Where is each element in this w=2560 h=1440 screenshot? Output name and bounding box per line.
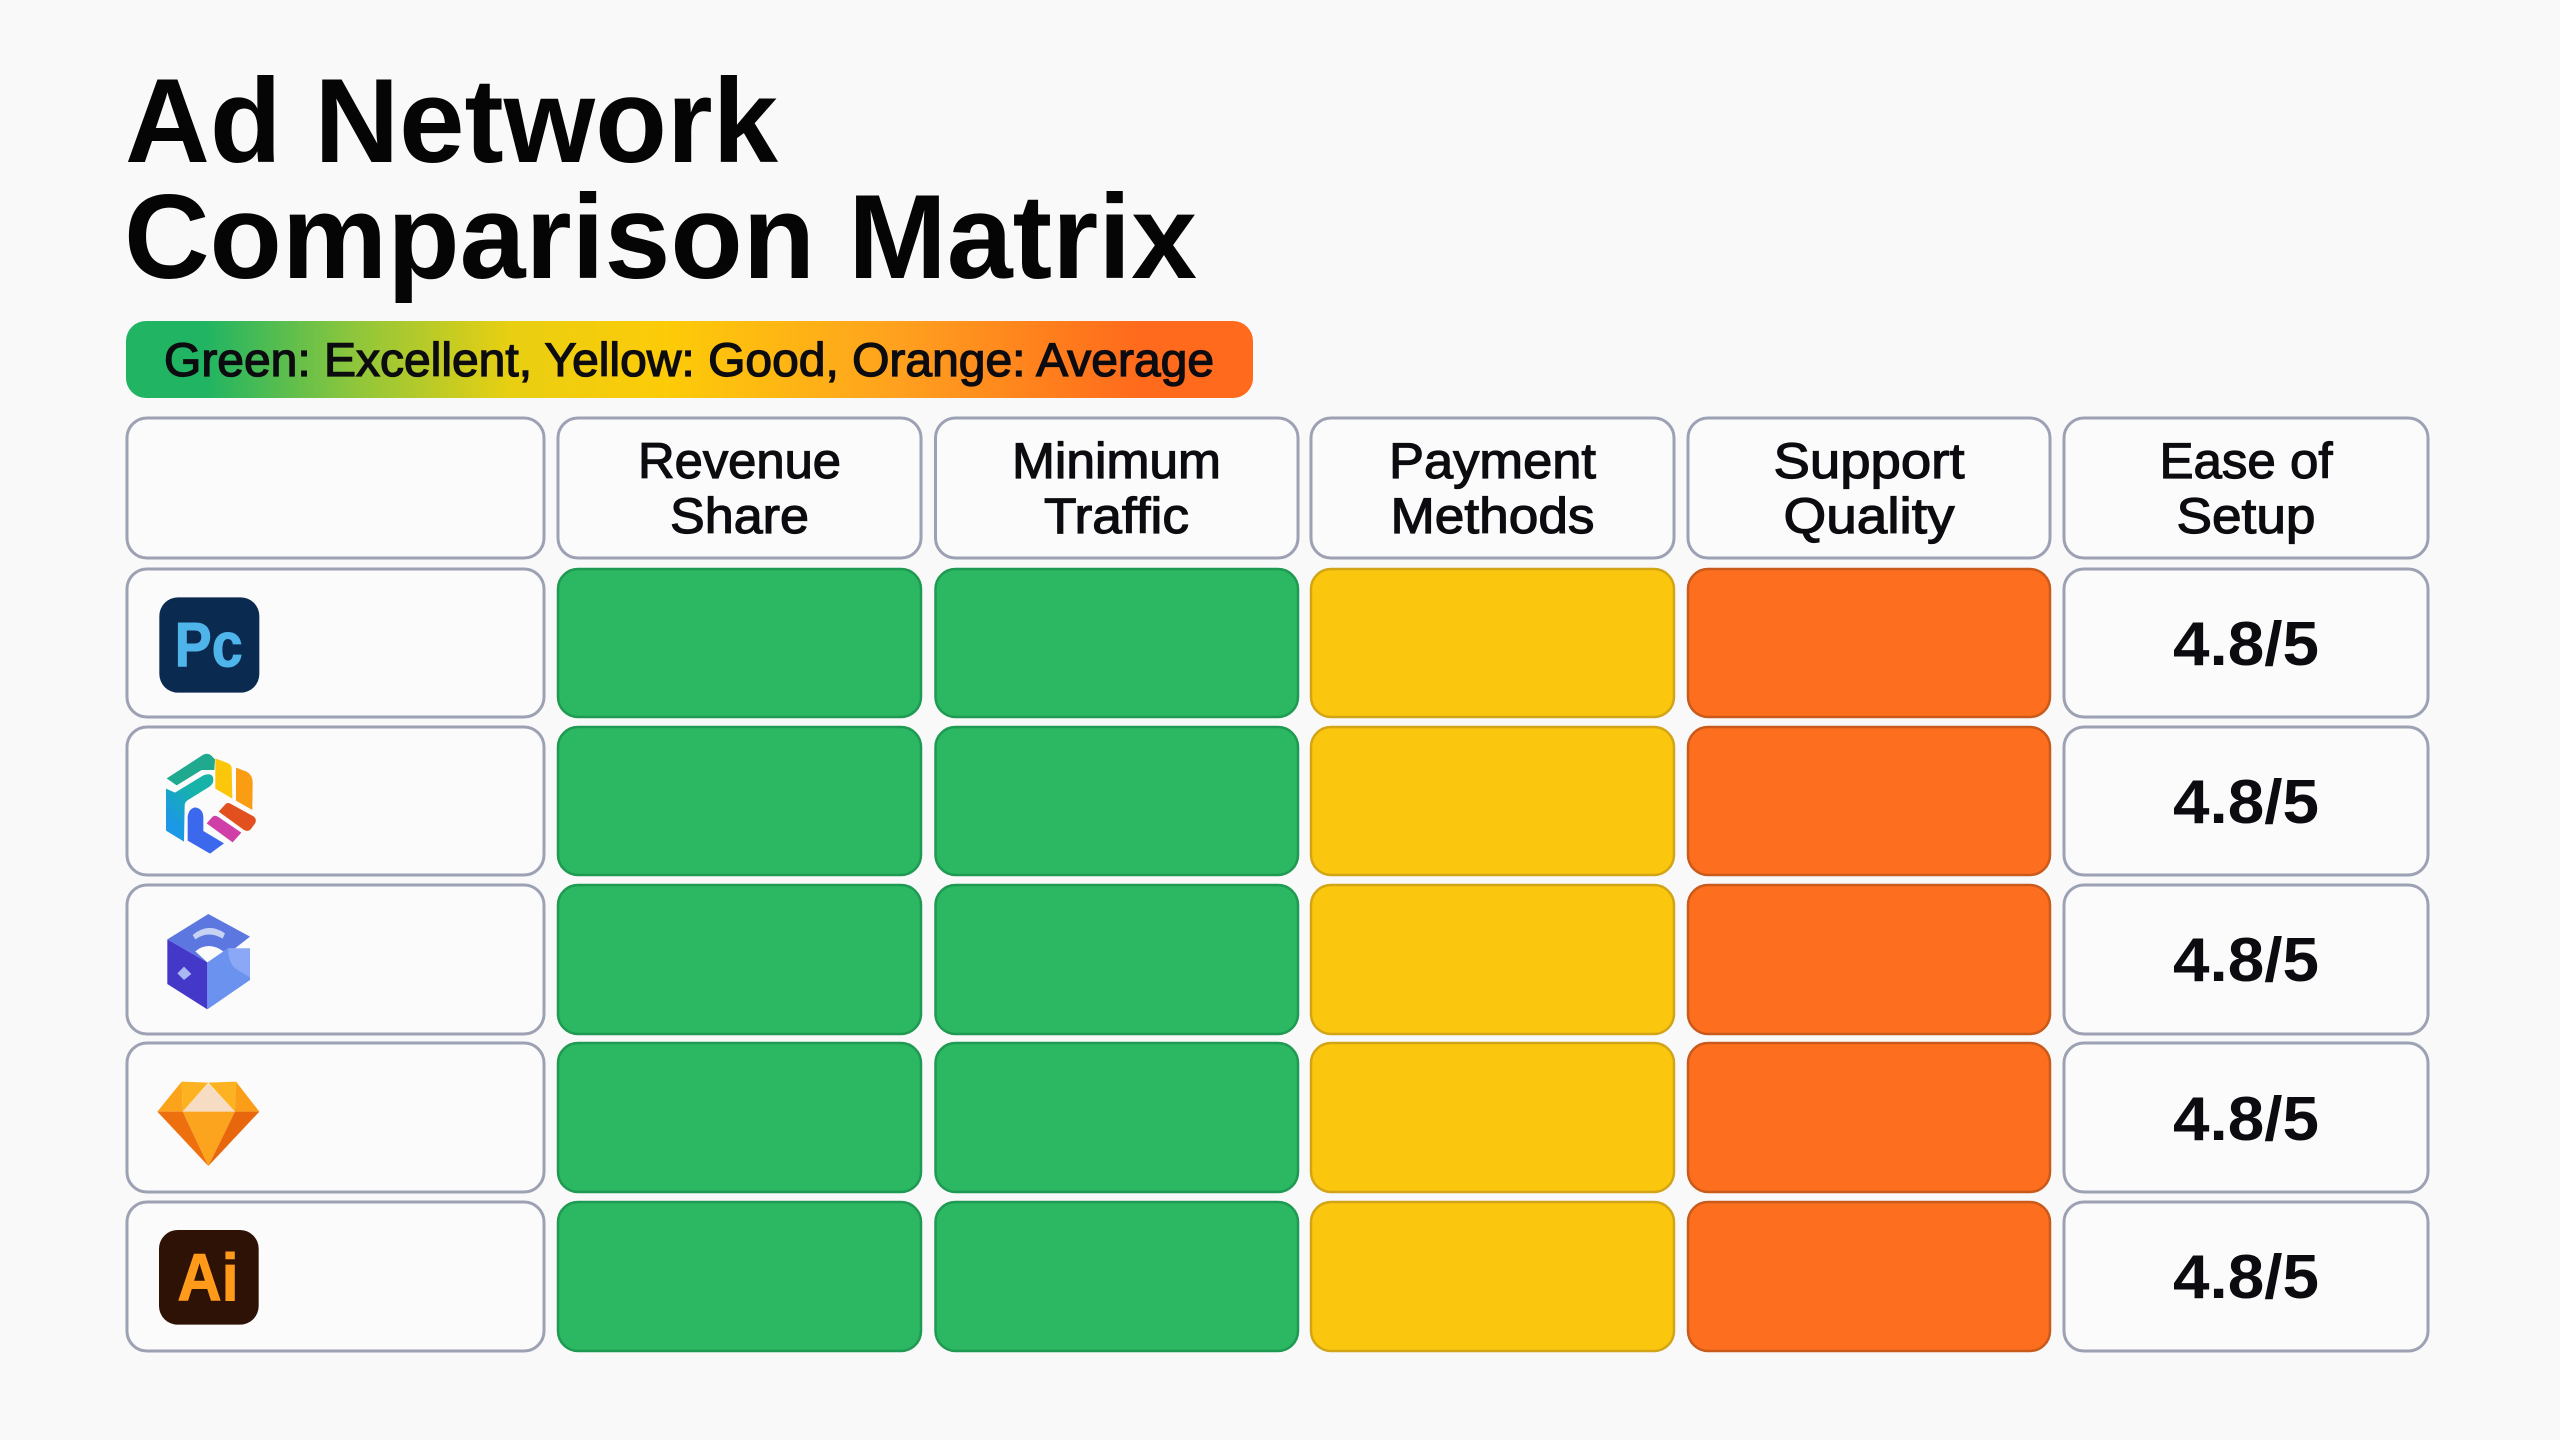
header: Minimum Traffic: [936, 418, 1298, 558]
title: [124, 54, 1197, 304]
network cell with hexagon icon: [127, 727, 544, 875]
rating: green: [936, 885, 1298, 1034]
score cell: [2064, 1043, 2428, 1192]
row 2: [127, 727, 2428, 875]
comparison matrix: [127, 418, 2428, 1351]
score cell: [2064, 1202, 2428, 1351]
header: Ease of Setup: Ease of: [2160, 433, 2333, 489]
icon: Pc: [159, 597, 259, 693]
rating: green: [558, 569, 921, 717]
row 3: [127, 885, 2428, 1034]
rating: yellow: [1311, 885, 1674, 1034]
empty corner cell: [127, 418, 544, 558]
rating: green: [936, 1043, 1298, 1192]
score cell: [2064, 885, 2428, 1034]
rating: green: [936, 1202, 1298, 1351]
score cell: 4.8/5: [2173, 926, 2319, 995]
header: Ease of Setup: Setup: [2176, 488, 2316, 544]
header: Support Quality: Support: [1774, 433, 1965, 489]
rating: orange: [1688, 1043, 2050, 1192]
rating: green: [936, 727, 1298, 875]
rating: green: [558, 1202, 921, 1351]
header: Support Quality: Quality: [1784, 488, 1954, 544]
header: Ease of Setup: [2064, 418, 2428, 558]
icon: colourful hexagon: [166, 754, 256, 854]
header: Minimum Traffic: Minimum: [1012, 433, 1221, 489]
rating: yellow: [1311, 1202, 1674, 1351]
rating: green: [936, 569, 1298, 717]
header: Minimum Traffic: Traffic: [1044, 488, 1189, 544]
rating: green: [558, 1043, 921, 1192]
header: Payment Methods: [1311, 418, 1674, 558]
rating: orange: [1688, 569, 2050, 717]
score cell: 4.8/5: [2173, 768, 2319, 837]
icon: orange gem: [157, 1082, 259, 1166]
icon: Ai: [159, 1230, 259, 1325]
header: Payment Methods: Methods: [1390, 488, 1594, 544]
legend bar: [126, 321, 1253, 398]
icon: blue cube: [167, 914, 250, 1009]
header: Revenue Share: [558, 418, 921, 558]
icon: Pc: Pc: [175, 611, 243, 681]
header: Revenue Share: Share: [670, 488, 809, 544]
network cell with Pc icon: [127, 569, 544, 717]
rating: orange: [1688, 885, 2050, 1034]
rating: yellow: [1311, 1043, 1674, 1192]
title: Comparison Matrix: [124, 170, 1197, 304]
score cell: 4.8/5: [2173, 1243, 2319, 1312]
score cell: 4.8/5: [2173, 1085, 2319, 1154]
rating: orange: [1688, 1202, 2050, 1351]
rating: yellow: [1311, 727, 1674, 875]
legend bar: Green: Excellent, Yellow: Good, Orange: Average: [164, 333, 1214, 386]
network cell with cube icon: [127, 885, 544, 1034]
header: Support Quality: [1688, 418, 2050, 558]
rating: green: [558, 727, 921, 875]
network cell with Ai icon: [127, 1202, 544, 1351]
header row: [127, 418, 2428, 558]
header: Revenue Share: Revenue: [638, 433, 841, 489]
network cell with gem icon: [127, 1043, 544, 1192]
rating: yellow: [1311, 569, 1674, 717]
title: Ad Network: [125, 54, 778, 188]
row 5: [127, 1202, 2428, 1351]
row 1: [127, 569, 2428, 717]
row 4: [127, 1043, 2428, 1192]
header: Payment Methods: Payment: [1389, 433, 1596, 489]
score cell: [2064, 727, 2428, 875]
rating: green: [558, 885, 921, 1034]
icon: Ai: Ai: [177, 1242, 239, 1316]
score cell: 4.8/5: [2173, 610, 2319, 679]
rating: orange: [1688, 727, 2050, 875]
score cell: [2064, 569, 2428, 717]
